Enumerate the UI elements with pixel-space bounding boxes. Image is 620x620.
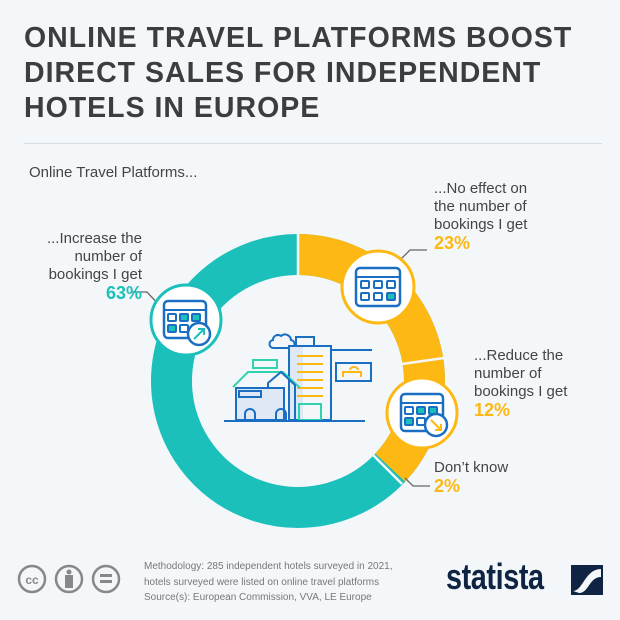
icon: reduce: [387, 378, 457, 448]
statista logo: statista: [446, 556, 544, 597]
label: reduce: 12%: [474, 400, 510, 420]
title: ONLINE TRAVEL PLATFORMS BOOST: [24, 22, 572, 54]
label: increase: [47, 230, 142, 303]
label: reduce: bookings I get: [474, 383, 567, 400]
label: reduce: ...Reduce the: [474, 347, 563, 364]
label: don't know: [434, 459, 508, 496]
footer text: hotels surveyed were listed on online travel platforms: [144, 576, 379, 588]
label: no effect: ...No effect on: [434, 180, 527, 197]
label: increase: number of: [74, 248, 142, 265]
label: increase: 63%: [106, 283, 142, 303]
footer text: Source(s): European Commission, VVA, LE Europe: [144, 592, 372, 603]
label: don't know: 2%: [434, 476, 460, 496]
label: no effect: 23%: [434, 233, 470, 253]
icon: no effect: [342, 251, 414, 323]
label: no effect: [434, 180, 528, 253]
label: no effect: bookings I get: [434, 216, 527, 233]
cc icons: cc: [25, 573, 39, 587]
footer text: [144, 561, 393, 603]
subtitle: Online Travel Platforms...: [29, 164, 197, 181]
cc icons: [18, 564, 120, 594]
footer text: Methodology: 285 independent hotels surveyed in 2021,: [144, 561, 393, 572]
title: DIRECT SALES FOR INDEPENDENT: [24, 57, 541, 89]
icon: increase: [151, 285, 221, 355]
label: increase: ...Increase the: [47, 230, 142, 247]
label: reduce: number of: [474, 365, 542, 382]
leader lines: [132, 250, 458, 486]
label: reduce: [474, 347, 568, 420]
title: HOTELS IN EUROPE: [24, 92, 320, 124]
title: [24, 22, 572, 124]
icon: hotel buildings: [224, 334, 372, 421]
label: increase: bookings I get: [49, 266, 142, 283]
label: no effect: the number of: [434, 198, 527, 215]
label: don't know: Don’t know: [434, 459, 508, 476]
